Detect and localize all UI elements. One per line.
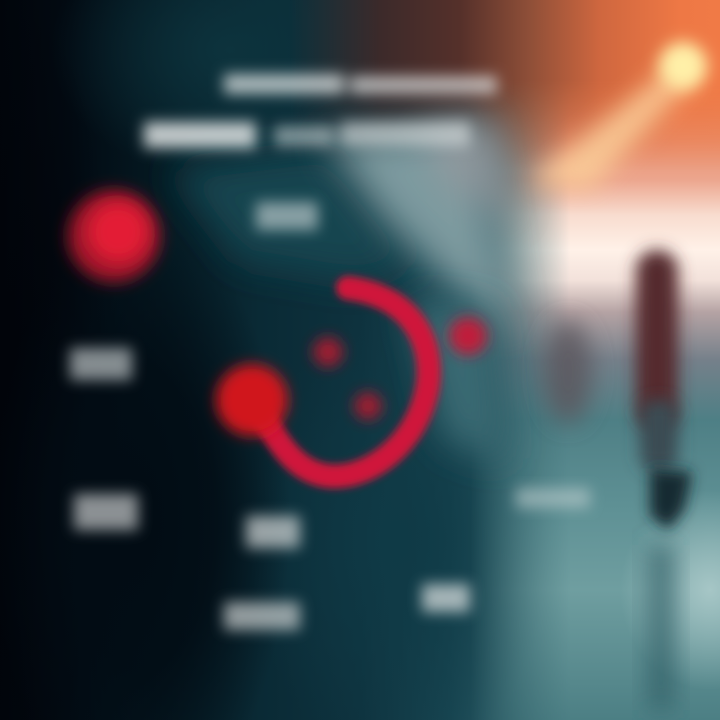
label: lower left <box>74 494 138 530</box>
grey diagonal surface <box>170 120 515 460</box>
background figure <box>544 320 592 424</box>
label: bottom right <box>422 584 470 612</box>
large red node <box>216 364 288 436</box>
ring arc <box>262 288 429 476</box>
floor glow: bottom right <box>560 480 720 700</box>
label: top centre <box>256 202 318 230</box>
foreground figure <box>636 250 692 710</box>
small inner node top <box>313 337 343 367</box>
sun beam <box>530 42 707 190</box>
sky: dark brown to orange <box>306 0 720 158</box>
label: right of centre <box>516 488 590 508</box>
title text <box>144 74 497 148</box>
small inner node bottom <box>354 392 382 420</box>
red circle icon <box>68 190 160 282</box>
right scene: horizon and floor <box>480 84 720 720</box>
label: lower centre <box>246 516 300 548</box>
red ring diagram <box>216 288 487 476</box>
label: left middle <box>70 348 132 380</box>
label: bottom centre <box>224 602 300 630</box>
right red node <box>449 317 487 355</box>
